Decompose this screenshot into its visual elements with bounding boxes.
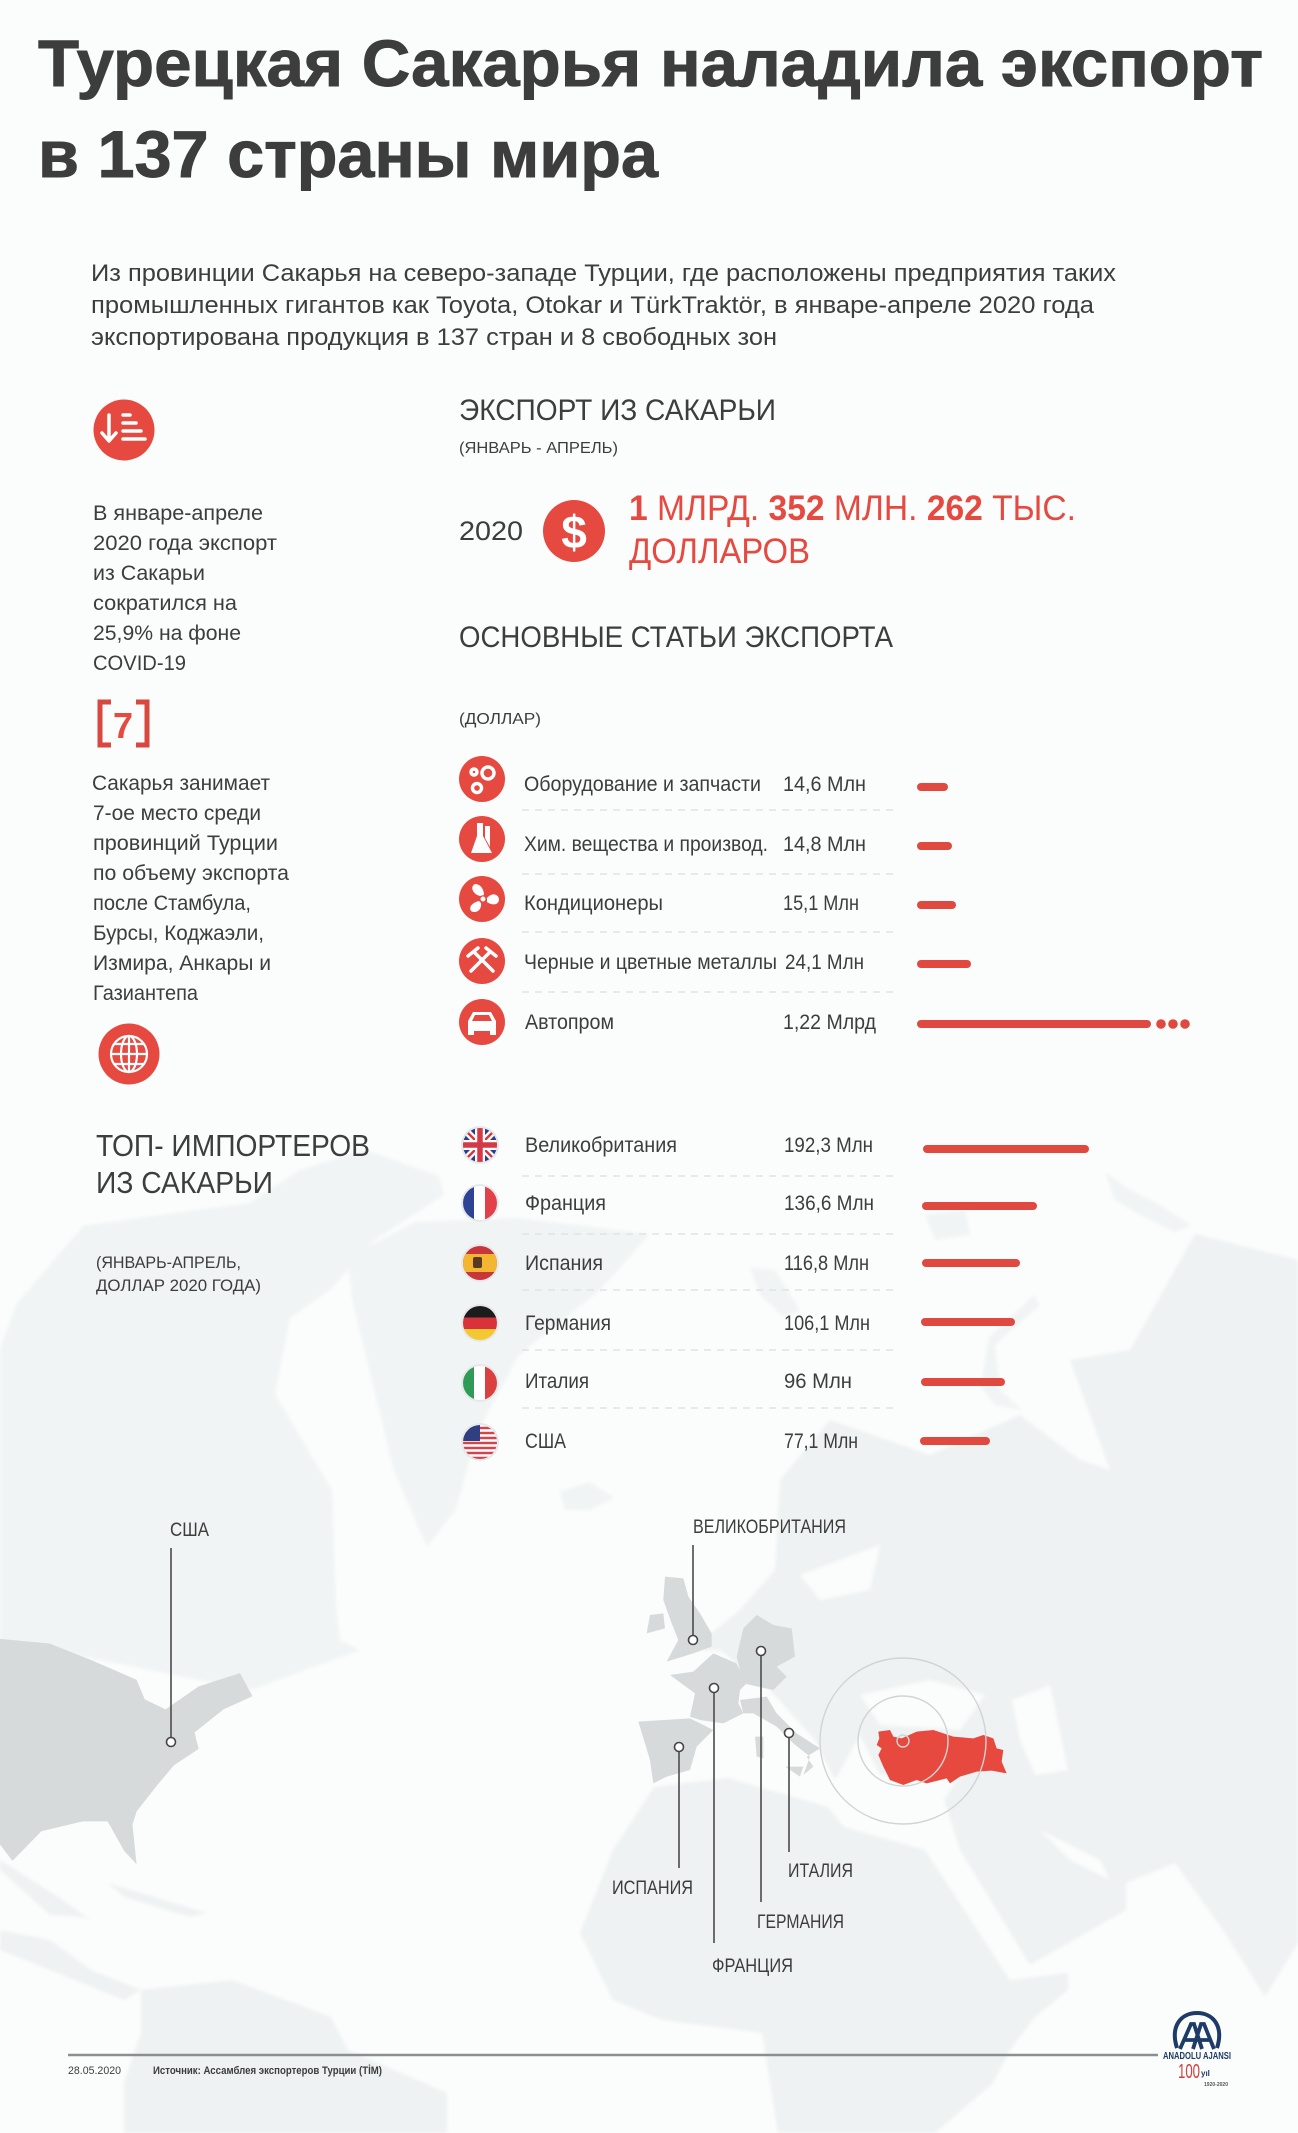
text: export fell 25.9%: В январе-апреле: [93, 501, 263, 525]
map: eastern USA: [0, 1639, 252, 1864]
heading: top importers: [96, 1128, 370, 1295]
map callout: Italy: [784, 1728, 853, 1882]
text: export fell 25.9%: сократился на: [93, 591, 237, 615]
row: Spain: [461, 1244, 1020, 1282]
icon: dollar: $: [561, 506, 587, 558]
text: export fell 25.9%: [93, 501, 277, 675]
heading: main export items: (ДОЛЛАР): [459, 711, 541, 728]
icon: bracketed number seven: 7: [113, 705, 133, 746]
row: Spain: Испания: [525, 1252, 603, 1275]
radar rings around Sakarya: [820, 1658, 986, 1824]
text: ranking among provinces: Сакарья занимает: [92, 771, 270, 795]
heading: export from Sakarya: (ЯНВАРЬ - АПРЕЛЬ): [459, 440, 618, 457]
row: France: 136,6 Млн: [784, 1192, 874, 1215]
row: United Kingdom: [460, 1125, 1089, 1165]
title: [38, 26, 1263, 191]
row: air conditioners: 15,1 Млн: [783, 892, 859, 915]
logo: Anadolu Agency: 1920-2020: [1204, 2082, 1228, 2088]
row: Germany: 106,1 Млн: [784, 1312, 870, 1335]
row: Italy: 96 Млн: [784, 1370, 852, 1393]
row: United Kingdom: 192,3 Млн: [784, 1134, 873, 1157]
row: metals: 24,1 Млн: [785, 951, 864, 974]
row: United Kingdom: Великобритания: [525, 1134, 677, 1157]
text: ranking among provinces: [92, 771, 289, 1005]
row: automotive: Автопром: [525, 1011, 614, 1034]
export total: [459, 489, 1076, 571]
map callout: Spain: ИСПАНИЯ: [612, 1878, 693, 1899]
map callout: France: ФРАНЦИЯ: [712, 1956, 793, 1977]
chart: export items: [459, 756, 1190, 1045]
heading: top importers: (ЯНВАРЬ-АПРЕЛЬ,: [96, 1254, 241, 1272]
footer: [68, 2055, 1158, 2077]
left column: seventh place note: [92, 702, 289, 1005]
map callout: Italy: ИТАЛИЯ: [788, 1861, 853, 1882]
map callout: USA: [166, 1520, 209, 1746]
heading: top importers: ДОЛЛАР 2020 ГОДА): [96, 1277, 261, 1295]
export total: 2020: [459, 516, 523, 546]
logo: Anadolu Agency: ANADOLU AJANSI: [1163, 2051, 1231, 2062]
text: export fell 25.9%: COVID-19: [93, 651, 186, 675]
row: automotive: [459, 999, 1190, 1045]
text: ranking among provinces: Газиантепа: [93, 981, 198, 1005]
map: importing European countries: [638, 1577, 820, 1783]
row: USA: США: [525, 1430, 566, 1453]
row: France: Франция: [525, 1192, 606, 1215]
logo: Anadolu Agency: yıl: [1201, 2069, 1210, 2078]
text: export fell 25.9%: 2020 года экспорт: [93, 531, 277, 555]
logo: Anadolu Agency: 100: [1178, 2061, 1200, 2083]
row: chemicals: 14,8 Млн: [783, 833, 866, 856]
text: export fell 25.9%: 25,9% на фоне: [93, 621, 241, 645]
heading: export from Sakarya: [459, 394, 776, 457]
map callout: Germany: [756, 1646, 844, 1933]
icon: globe: [98, 1024, 160, 1084]
text: ranking among provinces: по объему экспорта: [93, 861, 289, 885]
icon: export decline: [94, 400, 154, 460]
intro paragraph: экспортирована продукция в 137 стран и 8 свободных зон: [91, 324, 777, 351]
text: export fell 25.9%: из Сакарьи: [93, 561, 205, 585]
map: Turkey highlighted: [820, 1658, 1007, 1824]
row: machinery: 14,6 Млн: [783, 773, 866, 796]
row: metals: [459, 938, 971, 984]
row: machinery: Оборудование и запчасти: [524, 773, 761, 796]
chart: top importers: [460, 1125, 1089, 1461]
export amount: 1 МЛРД. 352 МЛН. 262 ТЫС.: [629, 489, 1076, 528]
row: USA: [461, 1423, 990, 1461]
row: Germany: [461, 1304, 1015, 1342]
text: ranking among provinces: 7-ое место среди: [93, 801, 261, 825]
heading: top importers: ИЗ САКАРЬИ: [96, 1165, 273, 1200]
row: chemicals: [459, 816, 952, 862]
heading: main export items: ОСНОВНЫЕ СТАТЬИ ЭКСПОРТА: [459, 621, 893, 654]
row: USA: 77,1 Млн: [784, 1430, 858, 1453]
left column: decline note: [93, 400, 277, 675]
row: Italy: Италия: [525, 1370, 589, 1393]
title: Турецкая Сакарья наладила экспорт: [38, 26, 1263, 100]
row: air conditioners: Кондиционеры: [524, 892, 663, 915]
text: ranking among provinces: провинций Турции: [93, 831, 278, 855]
export amount: [629, 489, 1076, 571]
row: Germany: Германия: [525, 1312, 611, 1335]
map callout: France: [710, 1684, 793, 1977]
text: ranking among provinces: Бурсы, Коджаэли,: [93, 921, 264, 945]
title: в 137 страны мира: [38, 117, 659, 191]
row: France: [461, 1184, 1037, 1222]
icon: bracketed number seven: [100, 702, 147, 746]
background world map: [0, 1150, 1298, 2133]
logo: Anadolu Agency: [1163, 2013, 1231, 2088]
text: ranking among provinces: Измира, Анкары и: [93, 951, 271, 975]
export amount: ДОЛЛАРОВ: [629, 532, 810, 571]
row: Italy: [461, 1364, 1005, 1402]
heading: main export items: [459, 621, 893, 728]
row: machinery: [459, 756, 948, 802]
map callout: Germany: ГЕРМАНИЯ: [757, 1912, 844, 1933]
text: ranking among provinces: после Стамбула,: [93, 891, 251, 915]
intro paragraph: [91, 260, 1116, 351]
heading: export from Sakarya: ЭКСПОРТ ИЗ САКАРЬИ: [459, 394, 776, 427]
intro paragraph: Из провинции Сакарья на северо-западе Турции, где расположены предприятия таких: [91, 260, 1116, 287]
row: metals: Черные и цветные металлы: [524, 951, 777, 974]
map callout: USA: США: [170, 1520, 209, 1541]
Turkey shape: [877, 1730, 1007, 1785]
row: automotive: 1,22 Млрд: [783, 1011, 876, 1034]
row: chemicals: Хим. вещества и производ.: [524, 833, 768, 856]
heading: top importers: ТОП- ИМПОРТЕРОВ: [96, 1128, 370, 1163]
icon: dollar: [543, 500, 605, 562]
map callout: United Kingdom: ВЕЛИКОБРИТАНИЯ: [693, 1517, 846, 1538]
footer: Источник: Ассамблея экспортеров Турции (TİM): [153, 2064, 382, 2077]
map callout: Spain: [612, 1742, 693, 1899]
intro paragraph: промышленных гигантов как Toyota, Otokar и TürkTraktör, в январе-апреле 2020 года: [91, 292, 1095, 319]
footer: 28.05.2020: [68, 2065, 121, 2077]
map callout: United Kingdom: [688, 1517, 846, 1644]
row: Spain: 116,8 Млн: [784, 1252, 869, 1275]
row: air conditioners: [459, 876, 956, 922]
